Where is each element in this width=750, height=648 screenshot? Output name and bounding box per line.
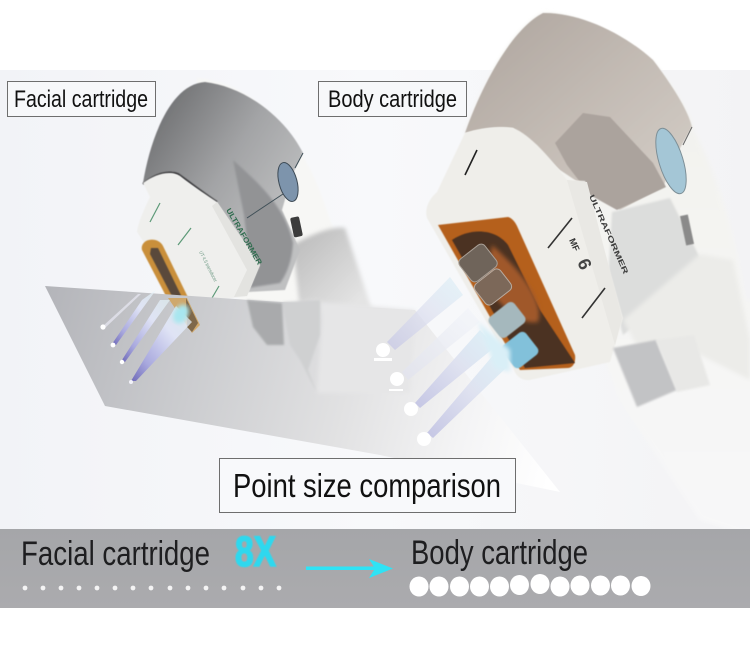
body cartridge caption: Body cartridge bbox=[411, 534, 588, 572]
control button bbox=[274, 160, 302, 204]
facial handpiece body: ULTRAFORMER bbox=[224, 206, 264, 267]
facial cartridge head bbox=[137, 173, 260, 306]
body handpiece: ULTRAFORMER bbox=[587, 193, 631, 276]
orange window bbox=[142, 240, 199, 331]
label: body cartridge: Body cartridge bbox=[328, 86, 457, 113]
small dots: facial bbox=[23, 586, 281, 590]
body foot bbox=[613, 340, 677, 407]
label: body cartridge bbox=[318, 82, 466, 116]
body handpiece bbox=[426, 13, 750, 540]
body handpiece: 6 bbox=[573, 255, 596, 273]
label: facial cartridge: Facial cartridge bbox=[14, 86, 148, 113]
body beams bbox=[374, 277, 510, 446]
heading: point size comparison: Point size comparison bbox=[233, 467, 501, 504]
body shell bbox=[465, 13, 692, 210]
body control button bbox=[650, 125, 692, 197]
orange window bbox=[438, 217, 575, 370]
facial handpiece body: UT 4.5 transducer bbox=[197, 250, 218, 283]
arrow bbox=[306, 559, 393, 578]
facial handpiece body bbox=[137, 78, 372, 340]
reflection plane bbox=[45, 286, 560, 492]
comparison bar bbox=[0, 528, 750, 608]
8X multiplier: 8X bbox=[235, 528, 276, 576]
heading: point size comparison bbox=[220, 458, 516, 512]
body cartridge head bbox=[426, 127, 623, 380]
facial cartridge caption: Facial cartridge bbox=[21, 535, 210, 573]
facial beams bbox=[100, 290, 192, 384]
background panel bbox=[0, 70, 750, 530]
plane reflections bbox=[168, 298, 415, 393]
body handpiece: MF bbox=[567, 237, 582, 253]
label: facial cartridge bbox=[8, 82, 156, 116]
large dots: body bbox=[410, 574, 650, 596]
transducer blocks bbox=[457, 242, 499, 284]
